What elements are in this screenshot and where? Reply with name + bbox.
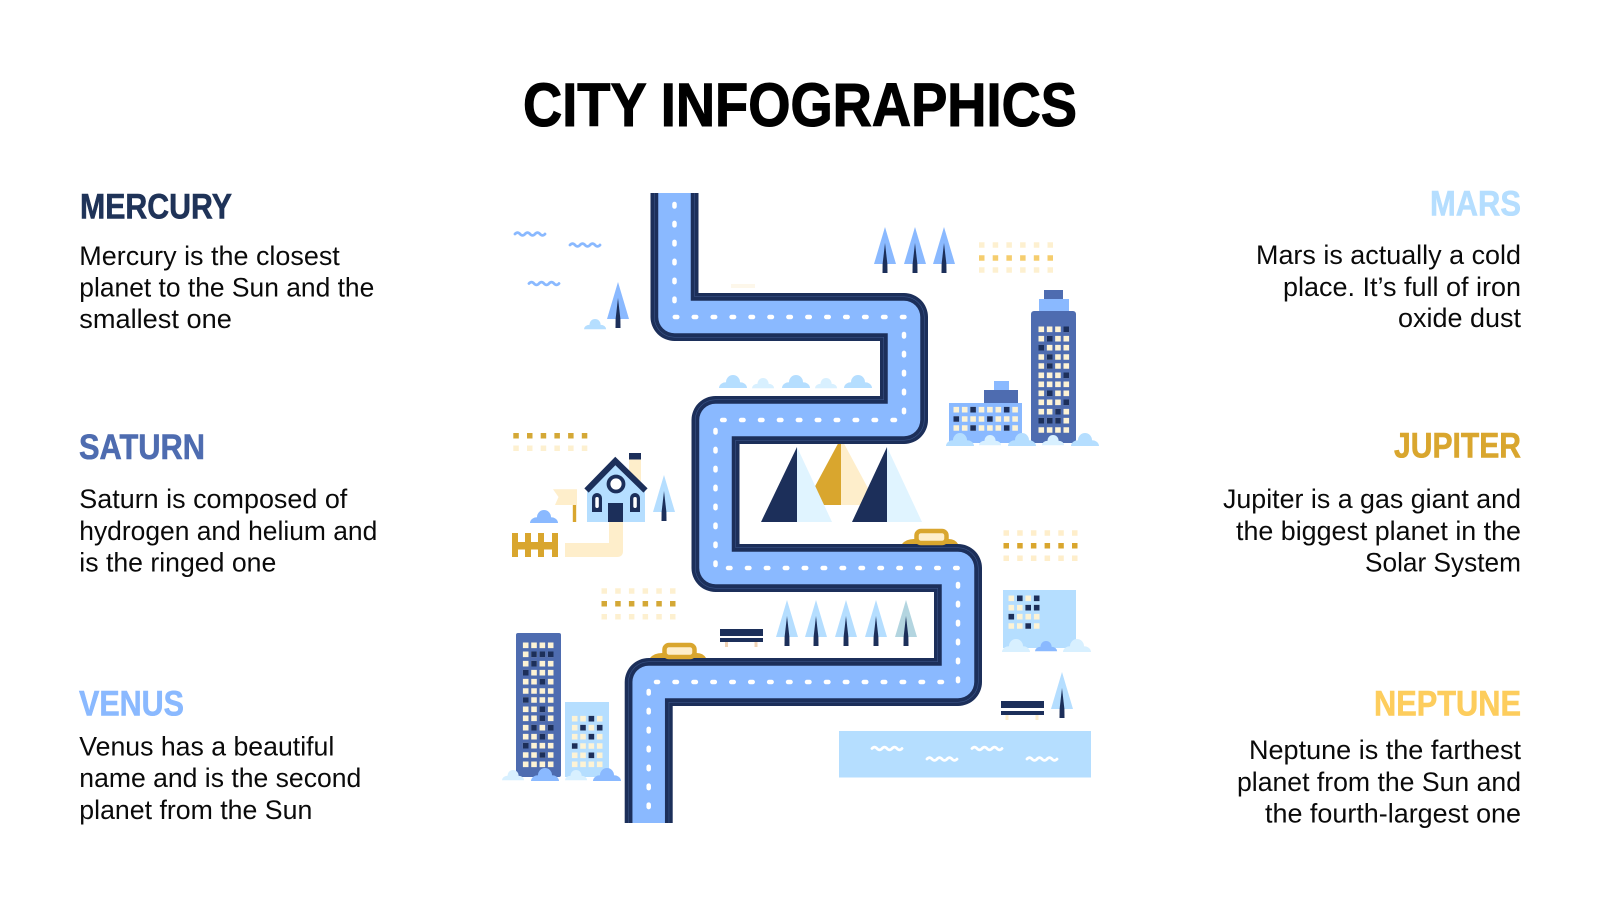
icon: tree and cloud top left [584, 282, 629, 329]
text block: venus: planet from the Sun [79, 795, 312, 825]
title: CITY INFOGRAPHICS [523, 71, 1077, 139]
text block: mercury: Mercury is the closest [79, 241, 340, 271]
icon: bench in park [720, 629, 763, 647]
text block: saturn: Saturn is composed of [79, 484, 348, 514]
tall tower [516, 633, 561, 777]
path to house [565, 522, 623, 557]
heading: mars: MARS [1430, 184, 1521, 223]
road centre dashes [649, 204, 959, 821]
low building [949, 381, 1022, 443]
text block: jupiter: Jupiter is a gas giant and [1223, 484, 1521, 514]
round window [608, 476, 624, 492]
panel: mars [1256, 184, 1522, 333]
illustration: water [839, 731, 1091, 778]
text block: venus [79, 732, 361, 825]
chimney [629, 453, 641, 481]
illustration: winding road [649, 193, 959, 823]
dots left [513, 436, 587, 448]
panel: venus [79, 684, 361, 825]
water waves [872, 747, 1057, 760]
roof [586, 461, 646, 490]
clouds at building base [946, 433, 1099, 446]
cloud by house [530, 510, 558, 523]
clouds row above mountains [719, 375, 872, 388]
tree by house [653, 475, 675, 521]
text block: mercury [79, 241, 374, 334]
icon: three trees top [874, 227, 955, 273]
text block: venus: Venus has a beautiful [79, 732, 334, 762]
dots top right [979, 245, 1053, 270]
row of park trees [776, 600, 917, 646]
dots mid right [1004, 533, 1078, 558]
text block: saturn: hydrogen and helium and [79, 516, 377, 546]
text block: mars: oxide dust [1398, 303, 1522, 333]
dots mid left [602, 591, 676, 617]
text block: mercury: planet to the Sun and the [79, 272, 374, 302]
text block: venus: name and is the second [79, 763, 361, 793]
text block: saturn: is the ringed one [79, 548, 276, 578]
text block: mars [1256, 240, 1522, 333]
house body [587, 461, 645, 522]
short building [565, 702, 609, 777]
fence [512, 533, 558, 557]
icon: birds [515, 233, 600, 285]
panel: mercury [79, 188, 374, 334]
clouds at building base [502, 768, 621, 781]
text block: mars: place. It’s full of iron [1283, 272, 1521, 302]
text block: jupiter: Solar System [1365, 548, 1521, 578]
heading: jupiter: JUPITER [1394, 426, 1521, 466]
illustration: buildings bottom left [502, 633, 621, 781]
illustration: mountains [761, 438, 922, 522]
panel: jupiter [1223, 426, 1521, 578]
icon: tree bottom right [1051, 672, 1073, 718]
text block: jupiter [1223, 484, 1521, 578]
flag [553, 489, 577, 522]
icon: taxi on upper road [902, 531, 958, 544]
heading: neptune: NEPTUNE [1374, 684, 1521, 723]
heading: saturn: SATURN [79, 428, 205, 467]
panel: neptune [1237, 684, 1522, 828]
heading: venus: VENUS [79, 684, 184, 723]
icon: taxi on lower road [650, 645, 706, 658]
text block: neptune [1237, 735, 1522, 828]
illustration: buildings top right [946, 290, 1099, 446]
text block: neptune: the fourth-largest one [1265, 798, 1521, 828]
illustration: building mid right [1002, 590, 1091, 652]
text block: saturn [79, 484, 377, 578]
text block: neptune: Neptune is the farthest [1249, 735, 1522, 765]
panel: saturn [79, 428, 377, 578]
arched windows and door [592, 493, 640, 522]
text block: mercury: smallest one [79, 304, 232, 334]
tall tower [1031, 290, 1076, 443]
heading: mercury: MERCURY [80, 188, 232, 226]
icon: bench bottom right [1001, 701, 1044, 720]
text block: neptune: planet from the Sun and [1237, 767, 1521, 797]
illustration: house with garden [512, 453, 675, 557]
text block: mars: Mars is actually a cold [1256, 240, 1521, 270]
text block: jupiter: the biggest planet in the [1236, 516, 1521, 546]
